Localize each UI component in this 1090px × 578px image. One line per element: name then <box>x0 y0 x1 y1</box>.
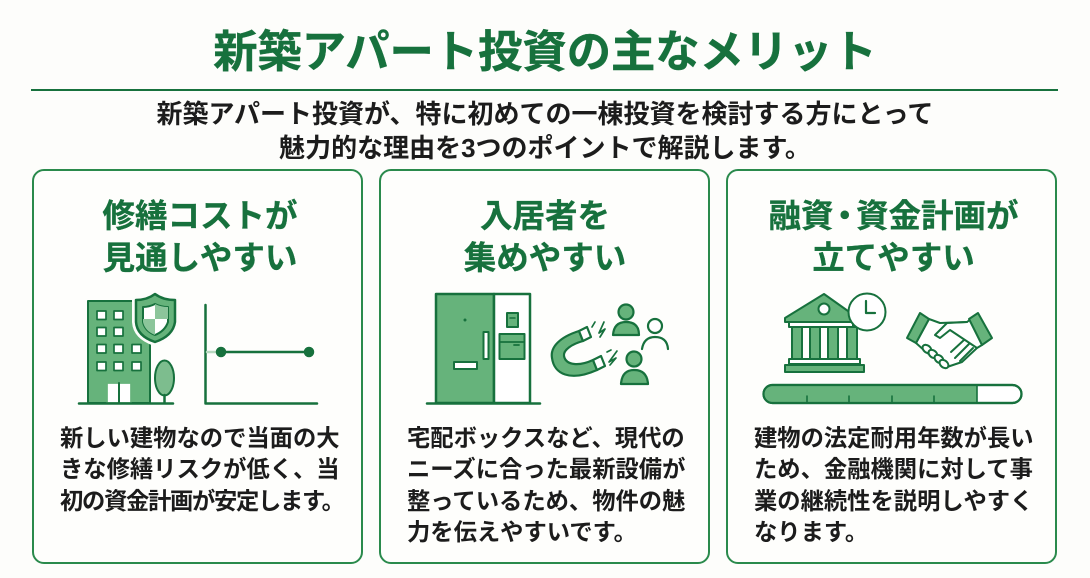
panel: financing <box>726 169 1057 564</box>
heading: financing <box>768 198 1019 276</box>
title rule <box>31 89 1058 91</box>
heading: repair costs: 見通しやすい <box>103 240 297 276</box>
body text: attracting tenants: ニーズに合った最新設備が <box>407 456 685 482</box>
heading: financing: 立てやすい <box>812 240 975 276</box>
icon: bank with clock <box>785 294 886 372</box>
heading: attracting tenants: 入居者を <box>480 198 610 234</box>
intro text: 新築アパート投資が、特に初めての一棟投資を検討する方にとって <box>157 99 933 129</box>
body text: attracting tenants <box>407 425 685 545</box>
chart: flat repair cost line <box>206 305 317 404</box>
icon: refrigerator-like door and delivery box <box>427 294 540 404</box>
body text: attracting tenants: 整っているため、物件の魅 <box>407 488 685 514</box>
body text: attracting tenants: 力を伝えやすいです。 <box>407 519 637 545</box>
body text: repair costs: 初の資金計画が安定します。 <box>60 488 344 514</box>
heading: attracting tenants <box>464 198 626 276</box>
body text: repair costs <box>60 425 344 514</box>
body text: financing: なります。 <box>754 519 868 545</box>
body text: financing <box>754 425 1034 545</box>
body text: repair costs: 新しい建物なので当面の大 <box>60 425 340 451</box>
title: 新築アパート投資の主なメリット <box>213 28 877 77</box>
body text: financing: ため、金融機関に対して事 <box>754 456 1033 482</box>
heading: attracting tenants: 集めやすい <box>464 240 626 276</box>
heading: financing: 融資・資金計画が <box>768 198 1019 234</box>
body text: financing: 建物の法定耐用年数が長い <box>754 425 1034 451</box>
body text: repair costs: きな修繕リスクが低く、当 <box>60 456 340 482</box>
icon: magnet attracting people <box>552 304 668 384</box>
heading: repair costs: 修繕コストが <box>102 198 298 234</box>
icon: apartment building with shield <box>79 294 175 404</box>
intro text <box>157 99 933 162</box>
body text: attracting tenants: 宅配ボックスなど、現代の <box>407 425 685 451</box>
gauge: financing progress bar <box>764 385 1022 403</box>
body text: financing: 業の継続性を説明しやすく <box>754 488 1033 514</box>
panel: attracting tenants <box>379 169 710 564</box>
panel: repair costs <box>32 169 363 564</box>
icon: handshake <box>907 313 992 370</box>
heading: repair costs <box>102 198 298 276</box>
intro text: 魅力的な理由を3つのポイントで解説します。 <box>279 132 811 162</box>
